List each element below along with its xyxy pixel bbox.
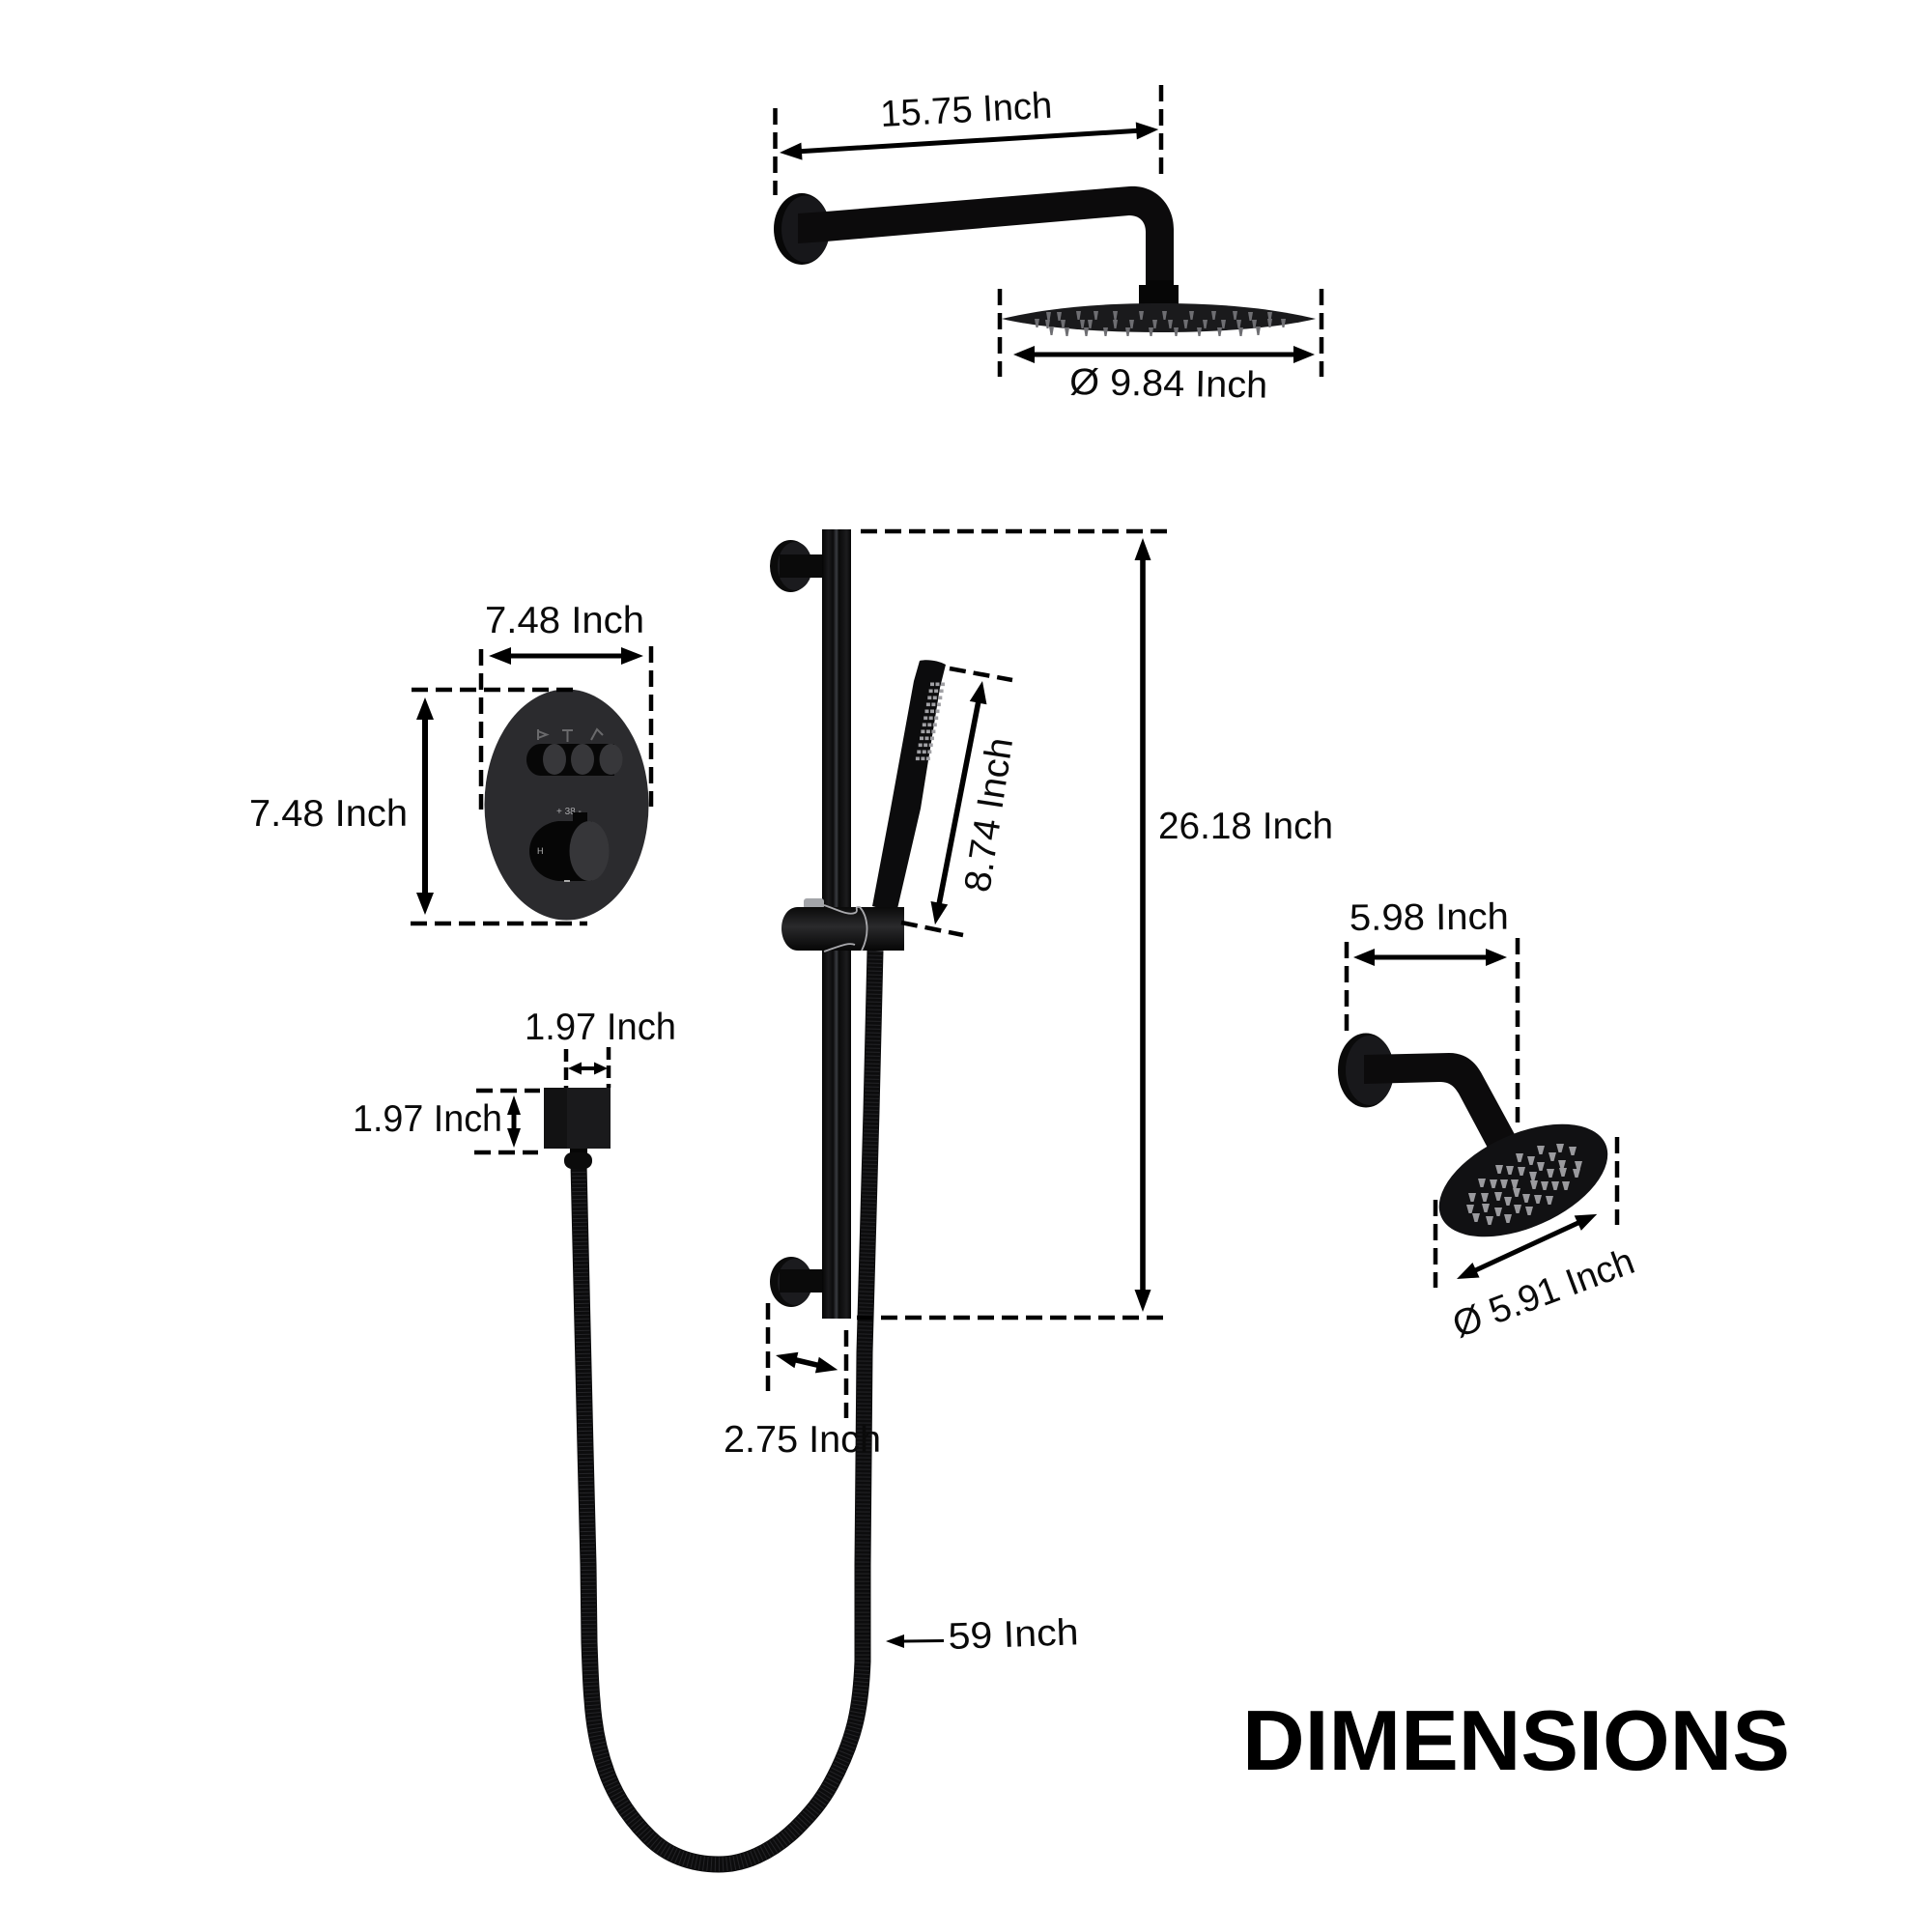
head nozzles: [1035, 311, 1286, 336]
hose body: [579, 951, 875, 1864]
hose ribbing: [579, 951, 875, 1864]
dimension: mixer height 7.48 inch: [249, 690, 587, 923]
round head: [1422, 1101, 1625, 1260]
connector neck: [1139, 280, 1179, 304]
main temperature knob: [529, 821, 609, 882]
clamp body: [781, 907, 904, 951]
double arrow: [1353, 949, 1507, 966]
three diverter knobs: [526, 744, 622, 776]
dimension: mixer width 7.48 inch: [481, 600, 651, 810]
label: 59 Inch: [948, 1611, 1079, 1658]
label: 1.97 Inch: [525, 1007, 676, 1048]
hose nut: [564, 1149, 592, 1169]
dimension: elbow width 1.97 inch: [525, 1007, 676, 1088]
clamp silver trim: [824, 905, 867, 952]
temperature stop: [573, 812, 587, 824]
label: Ø 9.84 Inch: [1069, 361, 1268, 407]
rain shower arm and head: [774, 186, 1316, 336]
extension lines: [481, 646, 651, 810]
double arrow: [1013, 346, 1315, 363]
rain head: [1002, 303, 1316, 332]
label: 8.74 Inch: [956, 735, 1021, 895]
shower arm: [798, 186, 1174, 280]
thermostatic mixer valve: [485, 690, 649, 920]
dimension: hand shower length 8.74 inch: [901, 668, 1021, 935]
hand shower and clamp: [781, 660, 946, 952]
double arrow: [507, 1095, 521, 1148]
label: 15.75 Inch: [879, 85, 1053, 135]
wall plate: [1338, 1034, 1394, 1107]
double arrow: [489, 647, 643, 665]
nozzles: [1466, 1144, 1582, 1225]
double arrow: [568, 1063, 608, 1074]
round plate: [485, 690, 649, 920]
label: 26.18 Inch: [1158, 806, 1333, 847]
label: 2.75 Inch: [724, 1419, 881, 1461]
square body: [544, 1088, 611, 1149]
small shower arm and head: [1338, 1034, 1625, 1260]
label: 5.98 Inch: [1350, 896, 1509, 939]
wall plate: [774, 193, 830, 265]
title: DIMENSIONS: [1242, 1692, 1790, 1788]
slide bar assembly: [770, 529, 851, 1319]
extension lines: [1347, 938, 1518, 1122]
double arrow: [779, 121, 1159, 161]
wall outlet elbow: [544, 1088, 611, 1169]
hand shower wand: [872, 660, 946, 913]
extension lines: [768, 1303, 846, 1418]
dimension: small head diameter 5.91 inch: [1435, 1137, 1640, 1346]
temperature scale: + 38 -: [556, 807, 582, 817]
extension lines: [566, 1047, 609, 1088]
dimension: bracket depth 2.75 inch: [724, 1303, 881, 1461]
label: Ø 5.91 Inch: [1447, 1240, 1640, 1346]
single arrow: [886, 1634, 944, 1648]
label: 7.48 Inch: [485, 600, 644, 641]
double arrow: [926, 679, 991, 926]
vertical bar: [822, 529, 851, 1319]
dimension: rain head diameter 9.84 inch: [1000, 289, 1321, 407]
angled arm: [1364, 1053, 1517, 1151]
extension lines: [1435, 1137, 1617, 1288]
spray nozzles: [916, 684, 946, 758]
top wall bracket: [770, 540, 824, 592]
extension lines: [901, 668, 1012, 935]
extension lines: [411, 690, 587, 923]
double arrow: [1134, 538, 1151, 1312]
slide bar hose (upper run and loop): [579, 951, 875, 1864]
dimension: elbow height 1.97 inch: [353, 1091, 540, 1152]
hot mark: H: [537, 846, 543, 856]
label: 7.48 Inch: [249, 793, 408, 835]
label: 1.97 Inch: [353, 1098, 502, 1140]
dimension: hose length 59 inch: [886, 1611, 1079, 1658]
clamp button: [804, 898, 824, 909]
dimension: slide bar height 26.18 inch: [857, 531, 1333, 1318]
dimension: arm length 15.75 inch: [775, 85, 1161, 195]
bottom wall bracket: [770, 1257, 824, 1307]
double arrow: [1453, 1207, 1601, 1287]
double arrow: [774, 1348, 839, 1378]
extension lines: [857, 531, 1167, 1318]
extension lines: [1000, 289, 1321, 377]
double arrow: [416, 697, 434, 915]
dimension: small arm reach 5.98 inch: [1347, 896, 1518, 1122]
extension lines: [474, 1091, 540, 1152]
function icons: [538, 729, 603, 742]
extension lines: [775, 85, 1161, 195]
